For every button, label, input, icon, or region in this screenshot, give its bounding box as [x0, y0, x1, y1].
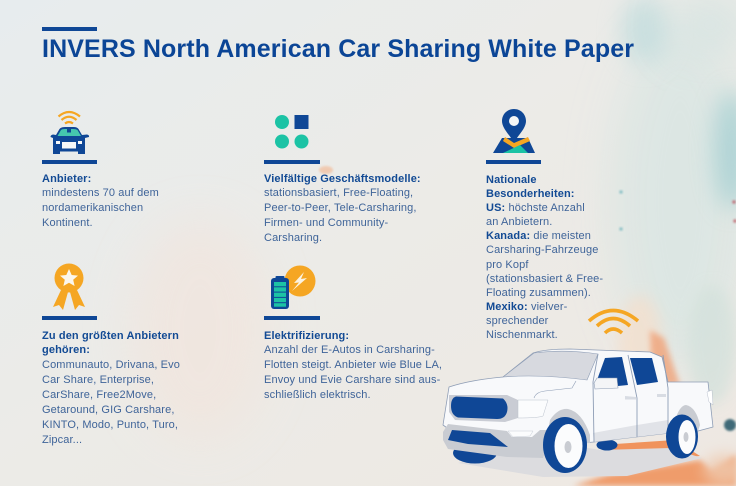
text: Elektrifizierung: Anzahl der E-Autos in Carsharing-	[264, 344, 435, 356]
divider: Geschäftsmodelle	[264, 160, 320, 164]
text: Elektrifizierung: Elektrifizierung:	[264, 330, 349, 342]
icon: award badge	[53, 264, 85, 310]
text: Geschäftsmodelle: Peer-to-Peer, Tele-Carsharing,	[264, 202, 417, 214]
text: größte Anbieter	[42, 330, 180, 446]
divider: größte Anbieter	[42, 316, 97, 320]
text: Nationale Besonderheiten: Mexiko: vielver-	[486, 301, 567, 313]
truck	[443, 349, 713, 477]
text: Nationale Besonderheiten: pro Kopf	[486, 259, 529, 271]
text: Geschäftsmodelle: Firmen- und Community-	[264, 217, 388, 229]
text: Nationale Besonderheiten: Besonderheiten:	[486, 188, 575, 200]
icon: battery with bolt	[271, 266, 316, 309]
panel: größte Anbieter	[42, 264, 180, 446]
panel: Geschäftsmodelle	[264, 115, 421, 244]
text: Nationale Besonderheiten: Floating zusammen).	[486, 287, 591, 299]
divider: Elektrifizierung	[264, 316, 320, 320]
text: Elektrifizierung: Envoy und Evie Carshare sind aus-	[264, 374, 440, 386]
title rule	[42, 27, 97, 31]
panel: Anbieter	[42, 110, 159, 229]
text: größte Anbieter: CarShare, Free2Move,	[42, 389, 156, 401]
title: INVERS North American Car Sharing White Paper	[42, 35, 634, 63]
text: Nationale Besonderheiten: (stationsbasiert & Free-	[486, 273, 603, 285]
text: Anbieter	[42, 172, 159, 229]
illustration: pickup truck with wifi signal	[442, 308, 714, 477]
panel: Nationale Besonderheiten	[486, 109, 603, 341]
text: Anbieter: mindestens 70 auf dem	[42, 187, 159, 199]
text: Anbieter: nordamerikanischen	[42, 202, 143, 214]
text: Anbieter: Anbieter:	[42, 172, 91, 184]
text: größte Anbieter: gehören:	[42, 344, 90, 356]
text: Geschäftsmodelle: Carsharing.	[264, 232, 322, 244]
icon: four shapes	[275, 115, 308, 148]
divider: Anbieter	[42, 160, 97, 164]
icon: wifi signal	[589, 310, 638, 333]
text: größte Anbieter: KINTO, Modo, Punto, Turo,	[42, 419, 178, 431]
text: größte Anbieter: Communauto, Drivana, Evo	[42, 359, 180, 371]
text: Nationale Besonderheiten: Nationale	[486, 174, 537, 186]
text: Geschäftsmodelle: Vielfältige Geschäftsmodelle:	[264, 172, 421, 184]
text: Elektrifizierung: schließlich elektrisch.	[264, 389, 371, 401]
text: Nationale Besonderheiten: Nischenmarkt.	[486, 329, 558, 341]
text: Elektrifizierung: Flotten steigt. Anbieter wie Blue LA,	[264, 359, 442, 371]
icon: map pin	[493, 109, 535, 153]
text: Nationale Besonderheiten: Kanada: die meisten	[486, 230, 591, 242]
text: Nationale Besonderheiten: US: höchste Anzahl	[486, 202, 585, 214]
text: größte Anbieter: Getaround, GIG Carshare,	[42, 404, 174, 416]
divider: Nationale Besonderheiten	[486, 160, 541, 164]
text: Geschäftsmodelle	[264, 172, 421, 244]
text: Nationale Besonderheiten: sprechender	[486, 315, 548, 327]
text: Geschäftsmodelle: stationsbasiert, Free-Floating,	[264, 187, 413, 199]
text: Nationale Besonderheiten: an Anbietern.	[486, 216, 552, 228]
text: größte Anbieter: Zipcar...	[42, 434, 82, 446]
text: größte Anbieter: Car Share, Enterprise,	[42, 374, 154, 386]
text: Nationale Besonderheiten	[486, 174, 603, 341]
text: Nationale Besonderheiten: Carsharing-Fahrzeuge	[486, 244, 598, 256]
text: Elektrifizierung	[264, 330, 442, 401]
text: größte Anbieter: Zu den größten Anbietern	[42, 330, 179, 342]
panel: Elektrifizierung	[264, 266, 442, 401]
icon: connected car	[50, 110, 90, 154]
text: Anbieter: Kontinent.	[42, 217, 93, 229]
